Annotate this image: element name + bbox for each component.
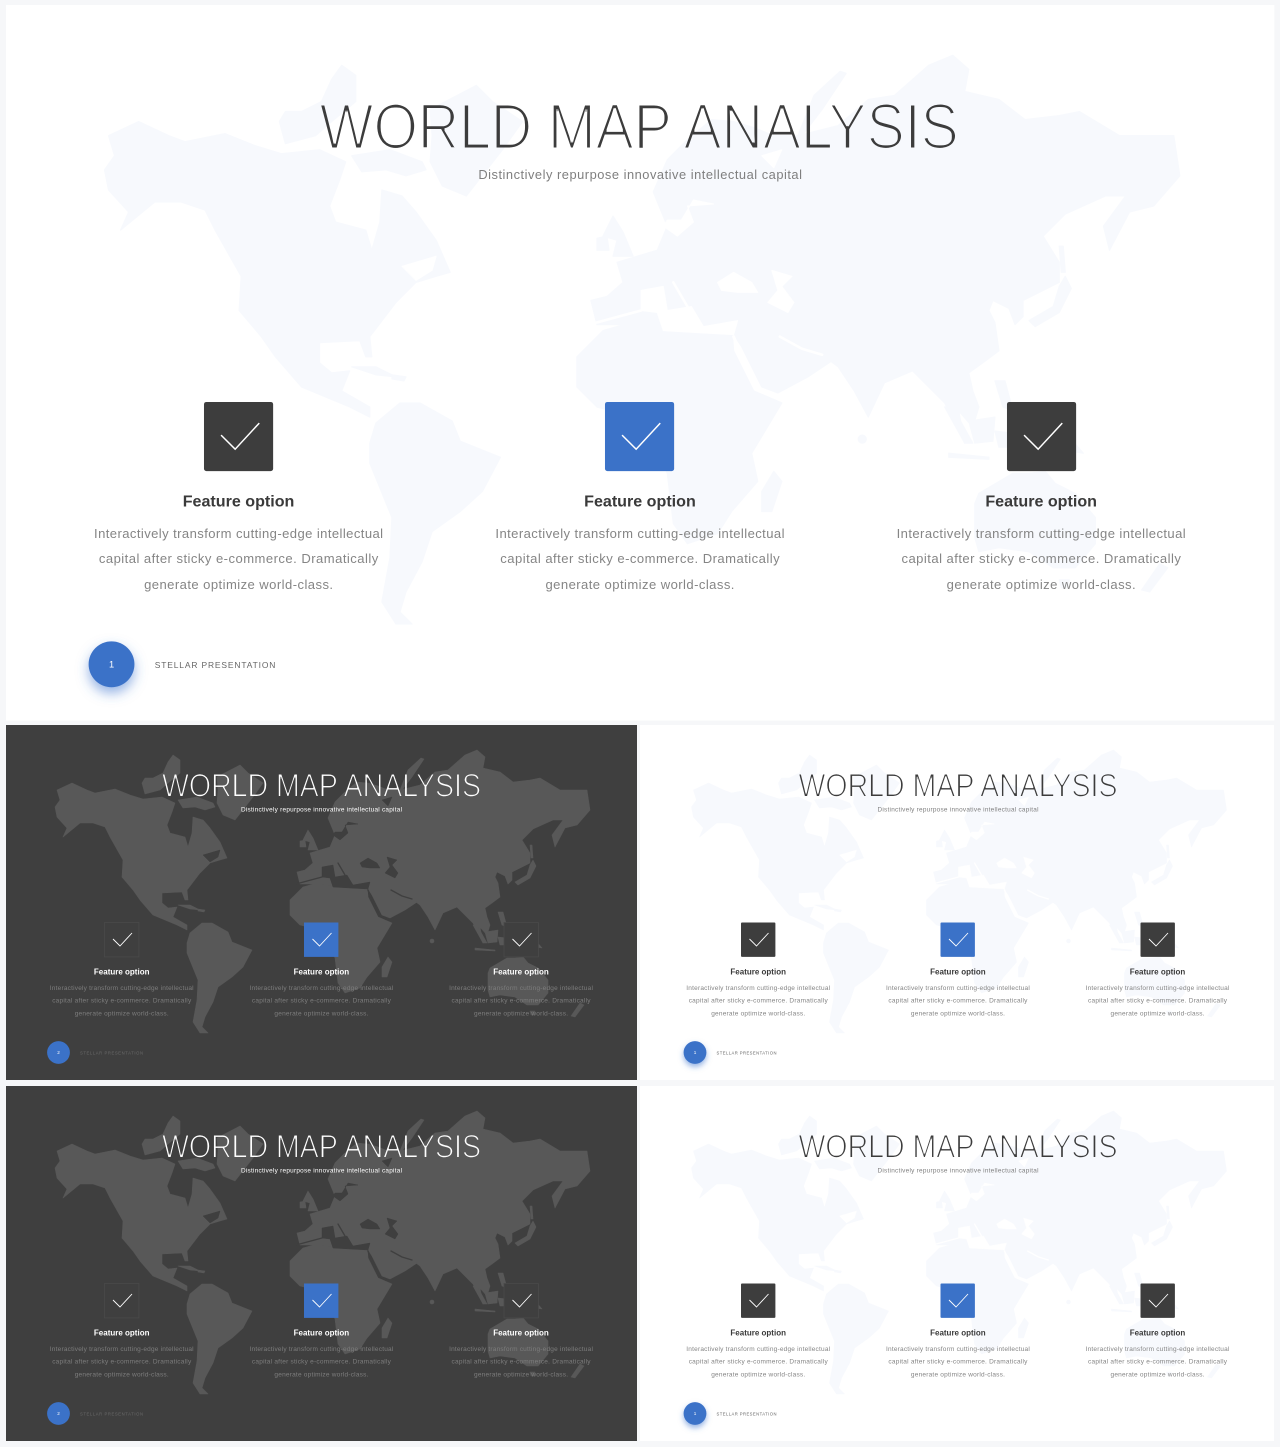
subtitle: Distinctively repurpose innovative intellectual capital	[878, 806, 1038, 814]
feature text	[94, 526, 383, 592]
subtitle: Distinctively repurpose innovative intellectual capital	[241, 1168, 402, 1174]
feature text	[50, 1346, 194, 1378]
feature text: capital after sticky e-commerce. Dramatically	[452, 998, 591, 1005]
feature text	[250, 1346, 394, 1378]
title: WORLD MAP ANALYSIS	[162, 1128, 481, 1164]
footer label: STELLAR PRESENTATION	[716, 1412, 776, 1416]
icon: check box outline	[504, 922, 538, 957]
feature text: generate optimize world-class.	[1110, 1010, 1205, 1018]
feature text: Interactively transform cutting-edge intellectual	[50, 985, 194, 992]
feature text: generate optimize world-class.	[75, 1010, 169, 1018]
icon: check box blue	[304, 922, 338, 957]
page number badge	[684, 1402, 706, 1425]
feature text: Interactively transform cutting-edge intellectual	[886, 1346, 1030, 1353]
feature column 3	[897, 402, 1186, 592]
page number badge	[47, 1402, 70, 1425]
icon: check box blue	[605, 402, 674, 471]
feature text: capital after sticky e-commerce. Dramatically	[252, 998, 392, 1005]
feature text	[686, 985, 831, 1018]
title: WORLD MAP ANALYSIS	[162, 767, 481, 803]
icon: check box blue	[304, 1284, 338, 1318]
feature text: generate optimize world-class.	[545, 577, 734, 592]
feature text	[250, 985, 394, 1018]
feature text: capital after sticky e-commerce. Dramatically	[888, 998, 1028, 1005]
footer label: STELLAR PRESENTATION	[716, 1050, 776, 1056]
subtitle: Distinctively repurpose innovative intellectual capital	[478, 167, 802, 182]
feature text: Interactively transform cutting-edge intellectual	[1086, 1346, 1230, 1353]
feature text: Interactively transform cutting-edge intellectual	[686, 985, 831, 992]
title: WORLD MAP ANALYSIS	[798, 1128, 1118, 1164]
icon: check box blue	[940, 922, 975, 957]
world map background	[692, 750, 1226, 1033]
feature text	[897, 526, 1186, 592]
feature text: Interactively transform cutting-edge intellectual	[495, 526, 785, 541]
feature column 3	[1086, 922, 1230, 1018]
feature heading: Feature option	[1130, 1328, 1185, 1338]
feature text: capital after sticky e-commerce. Dramatically	[252, 1359, 392, 1366]
feature text: Interactively transform cutting-edge intellectual	[250, 1346, 394, 1353]
page number badge	[47, 1041, 70, 1064]
feature column 2	[495, 402, 785, 592]
page number badge: 2	[57, 1411, 60, 1416]
feature text: Interactively transform cutting-edge intellectual	[897, 526, 1186, 541]
feature column 1	[94, 402, 383, 592]
icon: check box dark	[1140, 922, 1175, 957]
panel: main slide 1	[6, 5, 1274, 721]
panel: dark slide row 2	[6, 725, 637, 1080]
feature text: capital after sticky e-commerce. Dramatically	[452, 1359, 591, 1366]
feature column 3	[449, 1284, 593, 1378]
panel: light slide row 3	[640, 1086, 1274, 1441]
footer label: STELLAR PRESENTATION	[80, 1050, 143, 1056]
feature text: Interactively transform cutting-edge intellectual	[250, 985, 394, 992]
feature column 2	[250, 1284, 394, 1378]
feature heading: Feature option	[584, 492, 696, 510]
panel: dark slide row 3	[6, 1086, 637, 1441]
feature text: generate optimize world-class.	[911, 1010, 1005, 1018]
feature text: capital after sticky e-commerce. Dramatically	[500, 551, 780, 566]
feature text: Interactively transform cutting-edge intellectual	[449, 1346, 593, 1353]
title: WORLD MAP ANALYSIS	[798, 767, 1118, 803]
feature text: generate optimize world-class.	[274, 1010, 369, 1018]
feature text	[886, 985, 1030, 1018]
feature heading: Feature option	[183, 492, 294, 510]
world map background	[104, 55, 1180, 624]
feature text	[886, 1346, 1030, 1378]
feature heading: Feature option	[294, 968, 349, 976]
feature column 1	[50, 1284, 194, 1378]
feature text: capital after sticky e-commerce. Dramatically	[52, 998, 192, 1005]
feature text: generate optimize world-class.	[1110, 1372, 1205, 1378]
feature text	[495, 526, 785, 592]
feature column 2	[250, 922, 394, 1018]
feature text	[50, 985, 194, 1018]
feature text: Interactively transform cutting-edge intellectual	[94, 526, 383, 541]
page number badge	[89, 641, 134, 687]
feature text	[449, 985, 593, 1018]
feature text: generate optimize world-class.	[711, 1010, 805, 1018]
feature text: capital after sticky e-commerce. Dramatically	[99, 551, 379, 566]
feature heading: Feature option	[730, 968, 786, 976]
feature text: Interactively transform cutting-edge intellectual	[686, 1346, 831, 1353]
feature text: capital after sticky e-commerce. Dramatically	[52, 1359, 192, 1366]
feature column 2	[886, 1284, 1030, 1378]
icon: check box dark	[1007, 402, 1076, 471]
world map background	[55, 750, 590, 1033]
feature text: generate optimize world-class.	[274, 1372, 369, 1378]
feature text: generate optimize world-class.	[75, 1372, 169, 1378]
icon: check box dark	[1140, 1284, 1175, 1318]
feature text: capital after sticky e-commerce. Dramatically	[689, 998, 828, 1005]
panel: light slide row 2	[640, 725, 1274, 1080]
icon: check box dark	[741, 1284, 775, 1318]
feature text: Interactively transform cutting-edge intellectual	[50, 1346, 194, 1353]
feature heading: Feature option	[1130, 968, 1185, 976]
icon: check box blue	[940, 1284, 975, 1318]
feature heading: Feature option	[94, 968, 150, 976]
feature heading: Feature option	[493, 968, 549, 976]
page number badge	[684, 1041, 706, 1064]
page number badge: 1	[109, 660, 114, 670]
feature text	[1086, 1346, 1230, 1378]
feature column 3	[1086, 1284, 1230, 1378]
footer label: STELLAR PRESENTATION	[80, 1412, 143, 1416]
page number badge: 1	[694, 1050, 697, 1055]
icon: check box dark	[741, 922, 775, 957]
feature column 3	[449, 922, 593, 1018]
feature text: generate optimize world-class.	[474, 1010, 568, 1018]
feature text: capital after sticky e-commerce. Dramatically	[1088, 1359, 1228, 1366]
icon: check box outline	[104, 1284, 139, 1318]
feature column 2	[886, 922, 1030, 1018]
feature heading: Feature option	[930, 1328, 986, 1338]
feature text: generate optimize world-class.	[474, 1372, 568, 1378]
feature text: Interactively transform cutting-edge intellectual	[449, 985, 593, 992]
world map background	[692, 1111, 1226, 1394]
title: WORLD MAP ANALYSIS	[320, 91, 959, 163]
feature text: capital after sticky e-commerce. Dramatically	[901, 551, 1181, 566]
feature text: Interactively transform cutting-edge intellectual	[1086, 985, 1230, 992]
feature column 1	[686, 922, 831, 1018]
feature column 1	[50, 922, 194, 1018]
icon: check box outline	[104, 922, 139, 957]
feature text: generate optimize world-class.	[947, 577, 1136, 592]
feature column 1	[686, 1284, 831, 1378]
feature text: capital after sticky e-commerce. Dramatically	[689, 1359, 828, 1366]
feature heading: Feature option	[985, 492, 1097, 510]
subtitle: Distinctively repurpose innovative intellectual capital	[241, 806, 402, 814]
feature heading: Feature option	[730, 1328, 786, 1338]
feature text: generate optimize world-class.	[911, 1372, 1005, 1378]
feature text	[449, 1346, 593, 1378]
icon: check box dark	[204, 402, 273, 471]
feature heading: Feature option	[294, 1328, 349, 1338]
subtitle: Distinctively repurpose innovative intellectual capital	[878, 1168, 1038, 1174]
feature heading: Feature option	[493, 1328, 549, 1338]
icon: check box outline	[504, 1284, 538, 1318]
feature text: capital after sticky e-commerce. Dramatically	[888, 1359, 1028, 1366]
feature text: capital after sticky e-commerce. Dramatically	[1088, 998, 1228, 1005]
footer label: STELLAR PRESENTATION	[155, 660, 275, 670]
feature text: generate optimize world-class.	[144, 577, 333, 592]
feature text: Interactively transform cutting-edge intellectual	[886, 985, 1030, 992]
feature heading: Feature option	[930, 968, 986, 976]
page number badge: 1	[694, 1411, 697, 1416]
page number badge: 2	[57, 1050, 60, 1055]
feature text: generate optimize world-class.	[711, 1372, 805, 1378]
world map background	[55, 1111, 590, 1394]
feature text	[686, 1346, 831, 1378]
feature text	[1086, 985, 1230, 1018]
feature heading: Feature option	[94, 1328, 150, 1338]
